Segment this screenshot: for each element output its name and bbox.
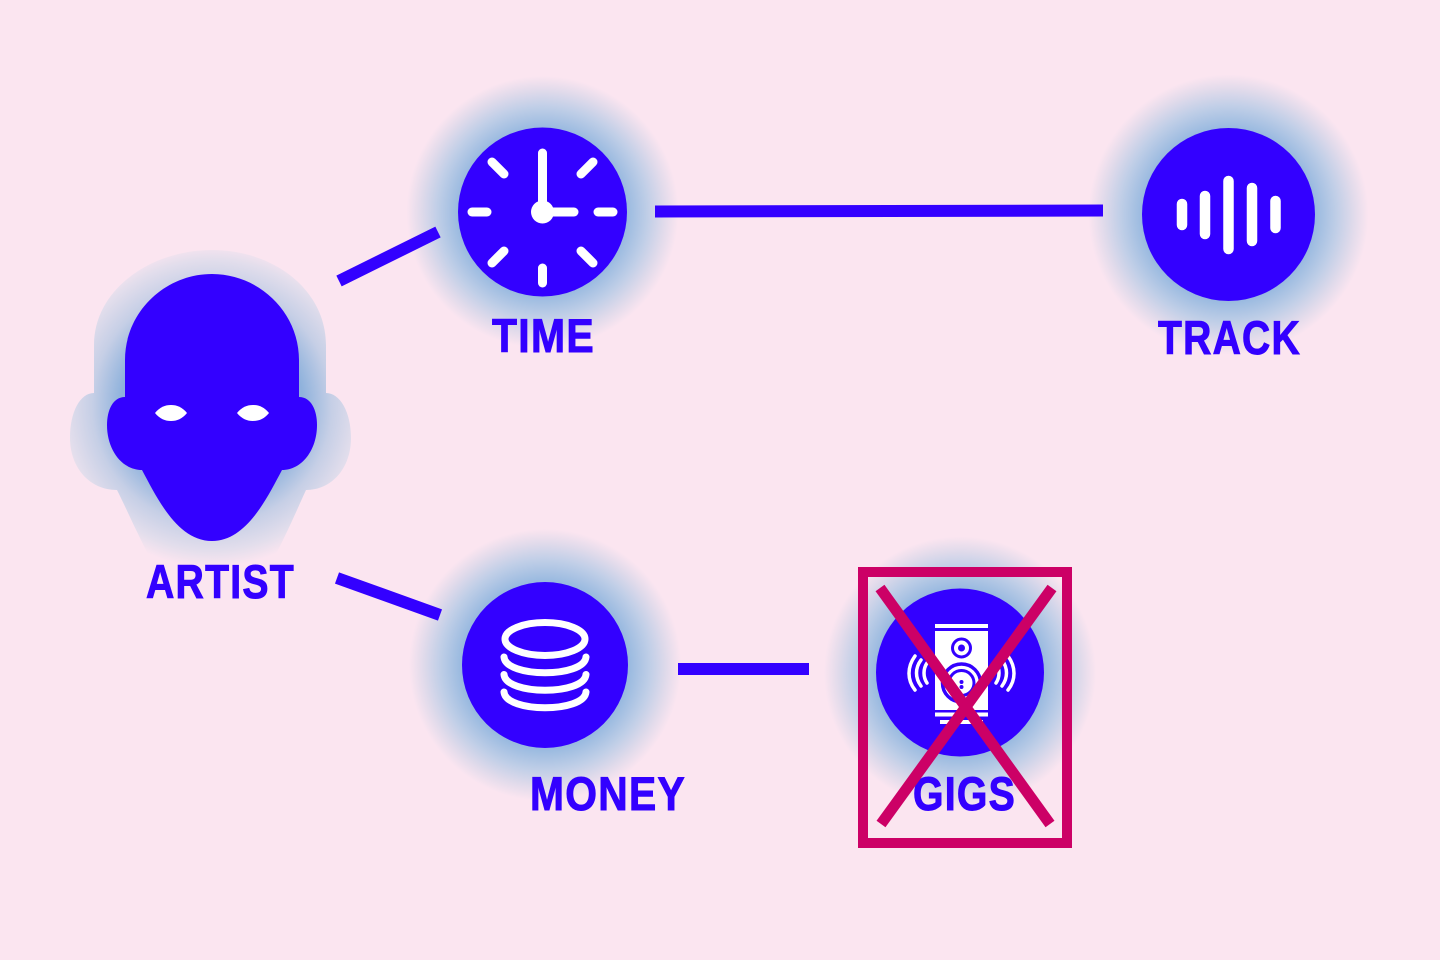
label: artist: ARTIST [146,555,295,608]
label: time: TIME [492,309,595,362]
icon: artist head [70,250,351,565]
label: track: TRACK [1158,311,1301,364]
icon: money coins [409,529,681,801]
icon: gigs speaker [824,536,1096,808]
icon: clock [406,76,678,348]
label: gigs: GIGS [913,767,1016,820]
crossed-out box over gigs [863,572,1067,843]
connector: money to gigs [678,663,809,675]
connector: artist to money [337,578,440,615]
connector: time to track [655,210,1103,212]
label: money: MONEY [530,767,686,820]
icon: track waveform [1088,74,1368,354]
connector: artist to time [339,232,438,281]
